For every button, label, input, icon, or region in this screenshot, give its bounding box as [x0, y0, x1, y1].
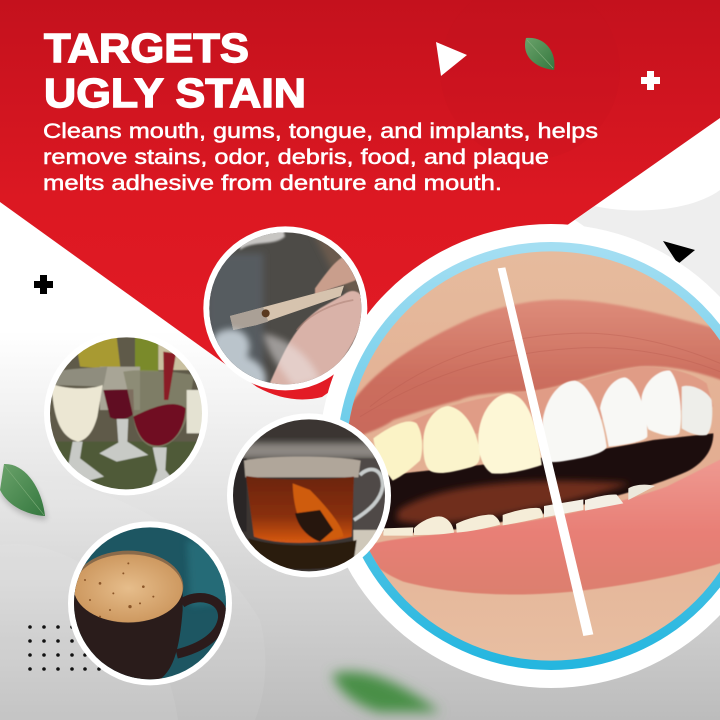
white wine glass [52, 367, 107, 387]
description text: melts adhesive from denture and mouth. [43, 172, 502, 195]
icon: blurred bottom leaf [332, 672, 440, 712]
divider line [498, 267, 593, 636]
main red glass [123, 370, 194, 447]
description text: remove stains, odor, debris, food, and plaque [43, 146, 549, 169]
photo: cup of tea [227, 413, 391, 580]
icon: left leaf [0, 464, 47, 520]
title [44, 25, 306, 116]
dot grid [28, 625, 101, 671]
stained upper teeth [373, 393, 542, 481]
photo: cup of coffee [68, 521, 232, 687]
icon: black plus [34, 275, 53, 294]
red header banner [0, 0, 720, 399]
lip creases [417, 332, 720, 376]
lower lip [370, 460, 720, 595]
icon: white triangle [436, 42, 467, 76]
smoke [212, 329, 266, 390]
hand [269, 290, 362, 384]
photo: wine glasses [44, 331, 208, 498]
icon: white plus [641, 71, 660, 90]
whitened upper teeth [543, 371, 712, 462]
description text: Cleans mouth, gums, tongue, and implants, helps [43, 120, 598, 143]
lower teeth [383, 485, 655, 536]
mouth interior [377, 433, 713, 533]
gums [407, 367, 713, 440]
title: UGLY STAIN [44, 70, 306, 116]
photo: cigarette [203, 226, 367, 390]
icon: black triangle [663, 241, 695, 264]
icon: top leaf [525, 38, 554, 70]
upper lip [340, 300, 720, 443]
small red glass [103, 389, 134, 419]
description text [43, 120, 598, 195]
cigarette [230, 286, 344, 330]
mouth photo circle [319, 224, 720, 688]
photo circles group [44, 226, 391, 687]
title: TARGETS [44, 25, 249, 71]
